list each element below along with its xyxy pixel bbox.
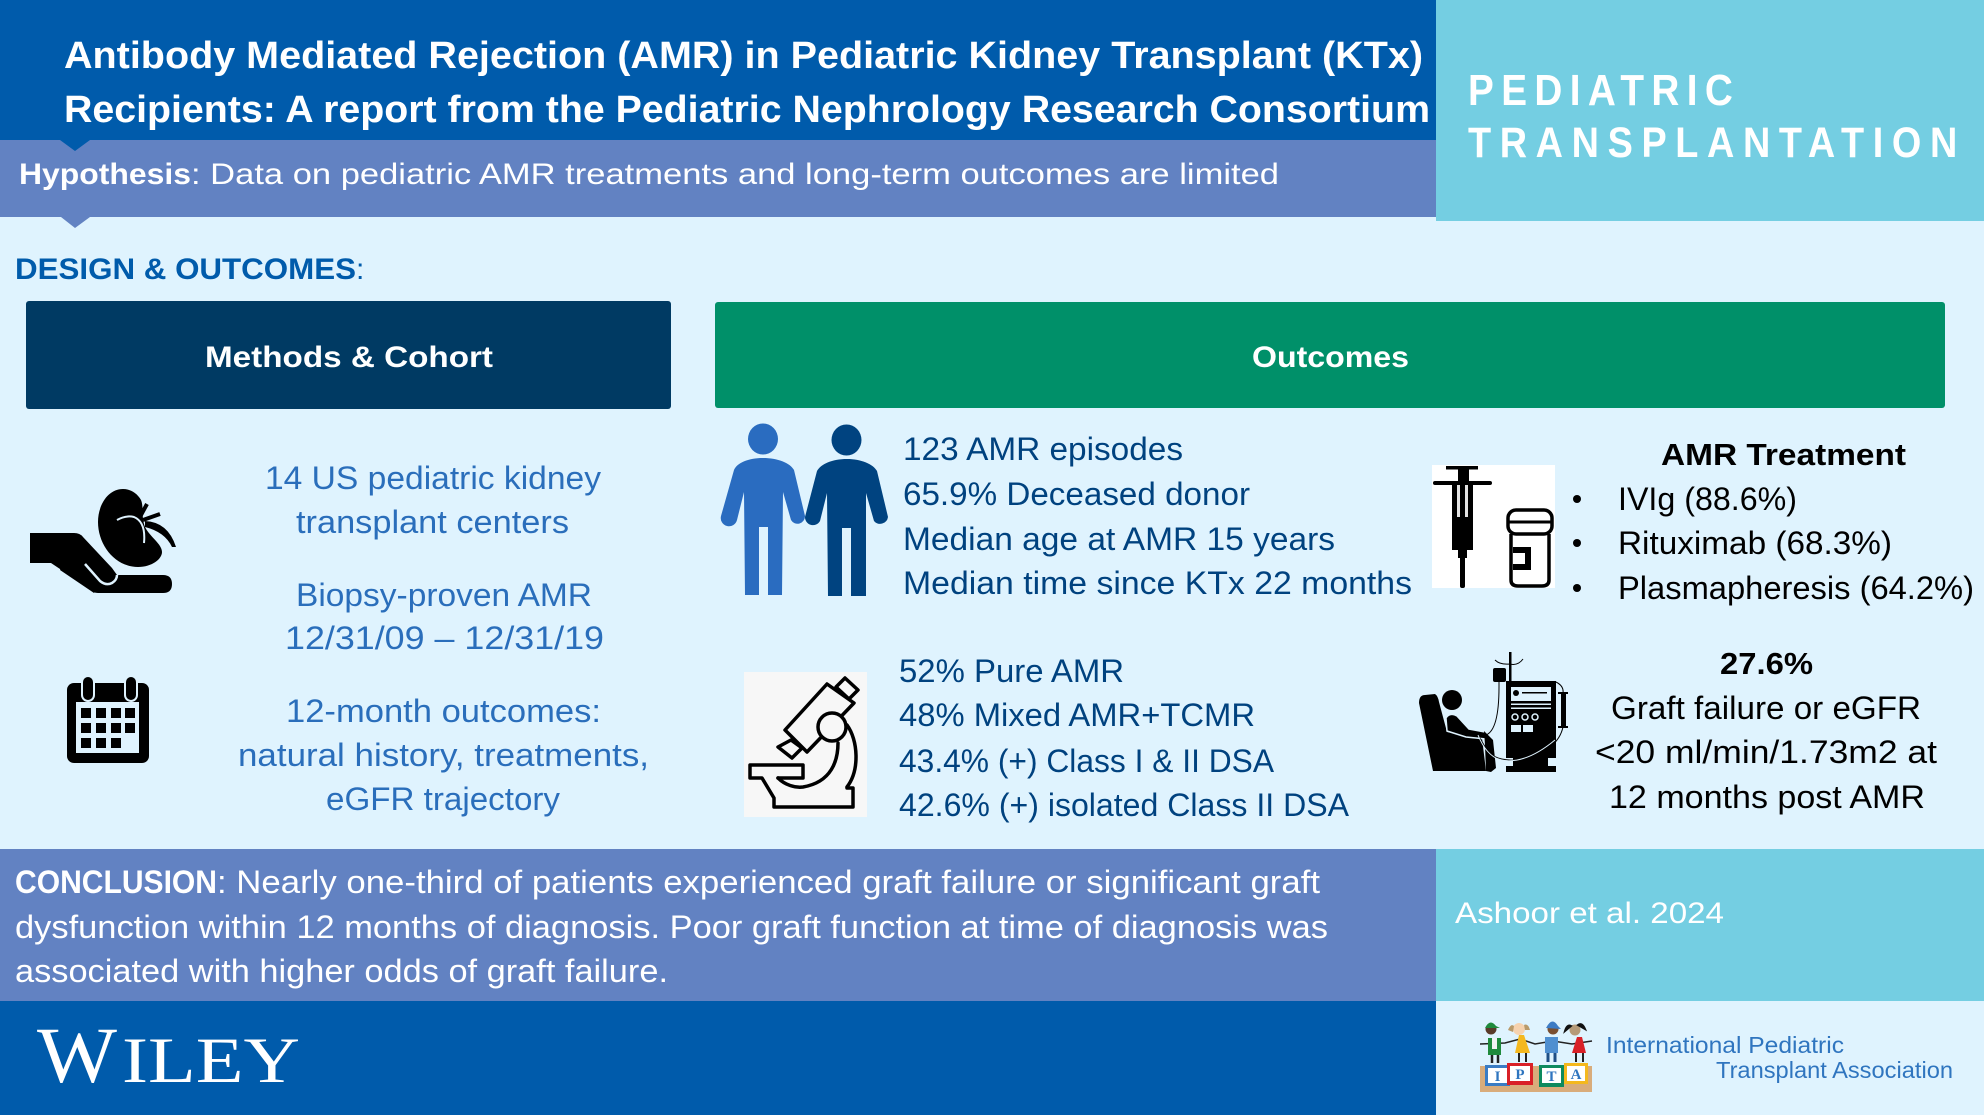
- hypothesis band: [0, 140, 1436, 228]
- filter and tubing: [1478, 682, 1568, 761]
- IPTA blocks: I: [1495, 1069, 1501, 1085]
- text: 12-month outcomes: [238, 693, 649, 817]
- IV pole and bag: [1478, 652, 1523, 735]
- IPTA blocks: A: [1571, 1067, 1582, 1083]
- icon: two people: [721, 424, 888, 596]
- citation panel: Ashoor et al. 2024: [1455, 897, 1724, 930]
- section heading: design and outcomes: :: [356, 253, 364, 286]
- person 1: [721, 424, 805, 595]
- conclusion band: : Nearly one-third of patients experienced graft failure or significant graft: [217, 864, 1320, 900]
- IPTA name: [1606, 1032, 1953, 1083]
- title: [64, 35, 1430, 131]
- conclusion band: CONCLUSION: [15, 864, 217, 900]
- citation panel: [1436, 849, 1984, 1001]
- Wiley logo: [37, 1013, 300, 1100]
- Wiley logo: W: [37, 1013, 117, 1100]
- text: graft failure outcome: 27.6%: [1720, 646, 1813, 681]
- text: graft failure outcome: [1595, 646, 1937, 815]
- chair: [1419, 694, 1486, 771]
- text: cohort outcomes: [903, 431, 1412, 601]
- icon: calendar: [67, 676, 149, 763]
- IPTA logo: [1480, 1021, 1953, 1092]
- panel header: outcomes: Outcomes: [1252, 341, 1409, 374]
- IPTA children: [1480, 1021, 1592, 1063]
- AMR treatment list: Plasmapheresis (64.2%): [1618, 570, 1974, 606]
- title: Antibody Mediated Rejection (AMR) in Pediatric Kidney Transplant (KTx): [64, 35, 1423, 77]
- panel header: outcomes: [715, 302, 1945, 408]
- hypothesis text: : Data on pediatric AMR treatments and long-term outcomes are limited: [191, 158, 1279, 191]
- journal panel: Pediatric Transplantation: PEDIATRIC: [1468, 65, 1733, 115]
- text: biopsy-proven AMR: 12/31/09 – 12/31/19: [285, 620, 604, 656]
- IPTA blocks: T: [1546, 1069, 1557, 1085]
- IPTA blocks: [1480, 1063, 1592, 1092]
- header band: title: [0, 0, 1436, 140]
- text: biopsy-proven AMR: [285, 577, 604, 656]
- IPTA name: International Pediatric: [1606, 1032, 1844, 1058]
- patient: [1442, 690, 1496, 772]
- AMR treatment list: [1573, 437, 1974, 606]
- icon: hand holding kidney: [30, 489, 176, 593]
- text: 12-month outcomes: 12-month outcomes:: [286, 693, 601, 729]
- text: graft failure outcome: Graft failure or eGFR: [1611, 690, 1921, 726]
- text: rejection type and DSA: 43.4% (+) Class I & II DSA: [899, 743, 1275, 779]
- machine: [1506, 681, 1556, 772]
- text: cohort outcomes: 123 AMR episodes: [903, 431, 1183, 467]
- text: cohort outcomes: Median age at AMR 15 years: [903, 521, 1335, 557]
- conclusion band: associated with higher odds of graft failure.: [15, 953, 668, 989]
- text: centers: 14 US pediatric kidney: [265, 460, 601, 496]
- journal panel: Pediatric Transplantation: TRANSPLANTATION: [1468, 118, 1957, 167]
- bottle: [1508, 510, 1552, 586]
- syringe: [1433, 466, 1492, 588]
- footer band with Wiley logo: [0, 1001, 1436, 1115]
- IPTA name: Transplant Association: [1716, 1057, 1953, 1083]
- text: rejection type and DSA: 48% Mixed AMR+TCMR: [899, 697, 1255, 733]
- icon: patient on dialysis machine: [1419, 652, 1568, 772]
- text: centers: transplant centers: [296, 504, 569, 540]
- title: Recipients: A report from the Pediatric Nephrology Research Consortium: [64, 89, 1430, 131]
- text: graft failure outcome: 12 months post AMR: [1609, 779, 1925, 815]
- conclusion band: dysfunction within 12 months of diagnosis. Poor graft function at time of diagnosis was: [15, 909, 1328, 945]
- IPTA blocks: P: [1515, 1067, 1525, 1083]
- text: 12-month outcomes: eGFR trajectory: [326, 781, 560, 817]
- icon: microscope: [744, 672, 867, 817]
- text: centers: [265, 460, 601, 540]
- text: 12-month outcomes: natural history, treatments,: [238, 737, 649, 773]
- hypothesis text: Hypothesis: [19, 158, 191, 191]
- person 2: [805, 424, 888, 596]
- text: cohort outcomes: 65.9% Deceased donor: [903, 476, 1250, 512]
- text: rejection type and DSA: 42.6% (+) isolated Class II DSA: [899, 787, 1350, 823]
- AMR treatment list: Rituximab (68.3%): [1618, 525, 1892, 561]
- text: biopsy-proven AMR: Biopsy-proven AMR: [296, 577, 592, 613]
- conclusion band: [0, 849, 1436, 1001]
- icon: syringe and pill bottle: [1432, 465, 1555, 588]
- text: graft failure outcome: <20 ml/min/1.73m2 at: [1595, 734, 1937, 770]
- journal panel: Pediatric Transplantation: [1436, 0, 1984, 221]
- Wiley logo: ILEY: [122, 1025, 300, 1097]
- section heading: design and outcomes: DESIGN & OUTCOMES: [15, 253, 356, 286]
- text: rejection type and DSA: 52% Pure AMR: [899, 653, 1124, 689]
- AMR treatment list: AMR Treatment: [1661, 437, 1906, 472]
- panel header: methods and cohort: [26, 301, 671, 409]
- panel header: methods and cohort: Methods & Cohort: [205, 341, 493, 374]
- text: cohort outcomes: Median time since KTx 22 months: [903, 565, 1412, 601]
- AMR treatment list: IVIg (88.6%): [1618, 481, 1797, 517]
- text: rejection type and DSA: [899, 653, 1350, 823]
